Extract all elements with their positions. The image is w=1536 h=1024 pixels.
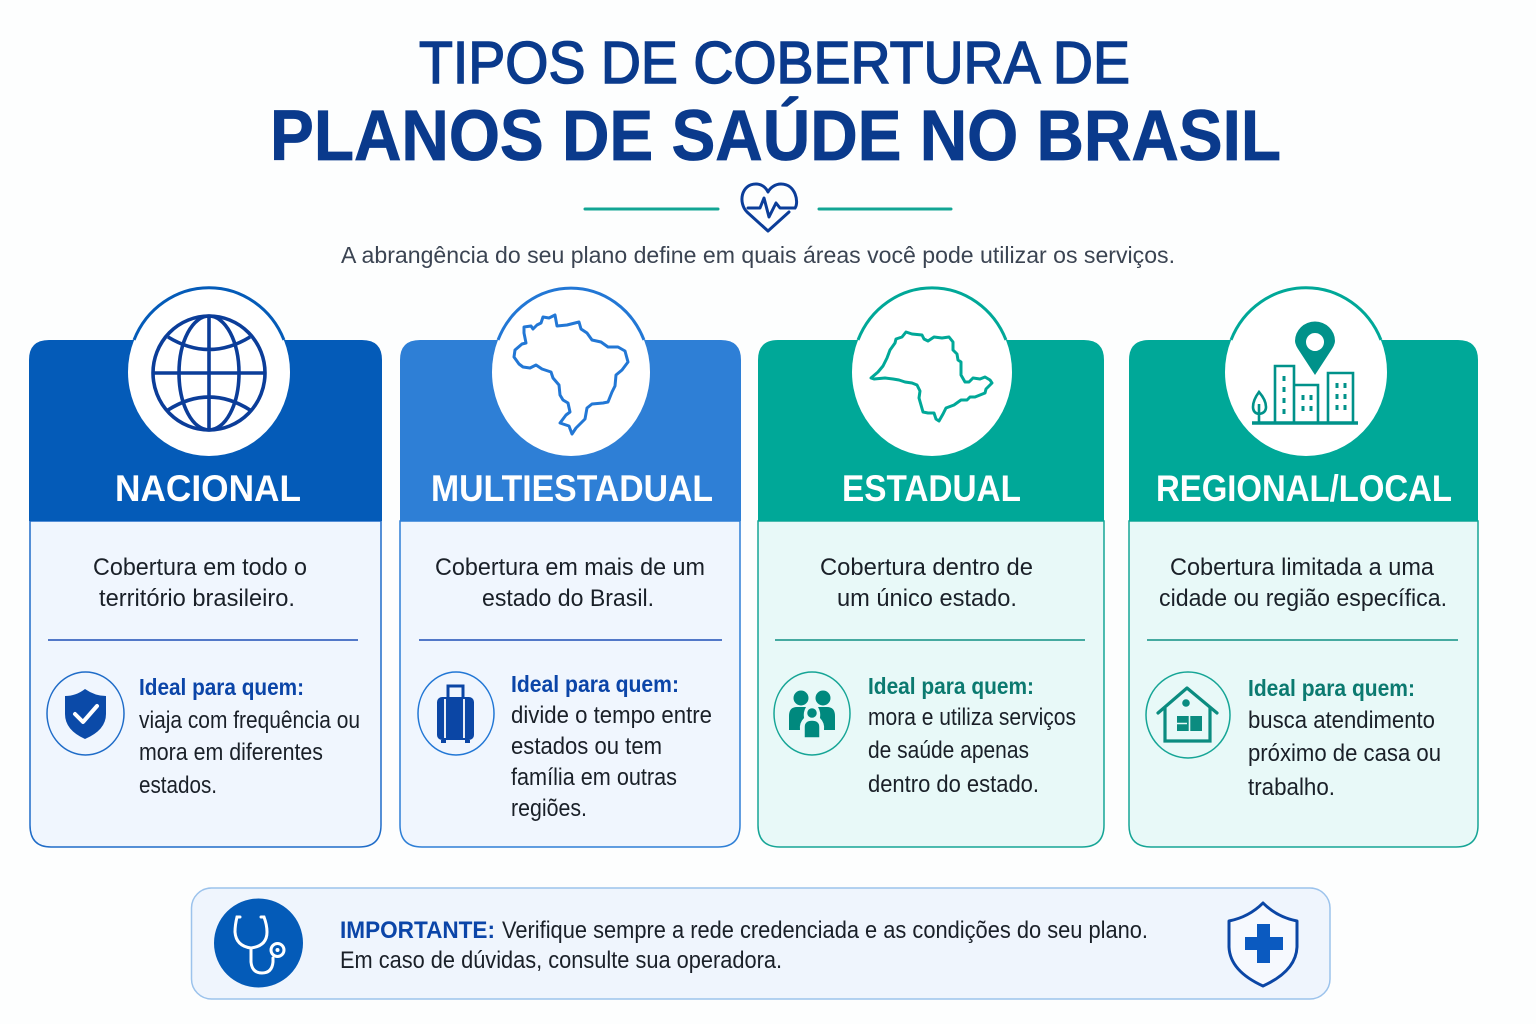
heading: regional/local: REGIONAL/LOCAL: [1156, 468, 1452, 509]
panel: estadual: [758, 288, 1104, 847]
callout text: Verifique sempre a rede credenciada e as condições do seu plano.: [502, 917, 1148, 944]
ideal text: estados ou tem: [511, 733, 662, 760]
ideal text: família em outras: [511, 764, 677, 791]
ideal text: Ideal para quem:: [868, 673, 1034, 699]
heading: multiestadual: MULTIESTADUAL: [431, 468, 713, 509]
description: território brasileiro.: [99, 585, 295, 612]
ideal text: estados.: [139, 772, 217, 799]
icon: shield with check: [47, 672, 124, 755]
card header: [1129, 340, 1478, 521]
title: TIPOS DE COBERTURA DE: [419, 30, 1130, 96]
ideal text: próximo de casa ou: [1248, 740, 1441, 767]
panel: nacional: [29, 288, 382, 847]
card body: [758, 521, 1104, 847]
icon: map of São Paulo: [852, 288, 1012, 456]
icon: stethoscope: [214, 898, 303, 988]
description: [1159, 554, 1447, 612]
ideal text: de saúde apenas: [868, 737, 1029, 764]
description: Cobertura em todo o: [93, 554, 307, 581]
callout box: [192, 888, 1330, 999]
callout text: Em caso de dúvidas, consulte sua operadora.: [340, 947, 782, 974]
ideal text: Ideal para quem:: [511, 671, 679, 697]
icon: map of Brazil: [492, 288, 650, 456]
ideal text: busca atendimento: [1248, 707, 1435, 734]
description: estado do Brasil.: [482, 585, 654, 612]
card body: [400, 521, 740, 847]
icon: shield with cross: [1229, 903, 1297, 986]
ideal text: [139, 674, 360, 799]
description: [435, 554, 705, 612]
card body: [1129, 521, 1478, 847]
description: cidade ou região específica.: [1159, 585, 1447, 612]
heading: nacional: NACIONAL: [115, 468, 301, 509]
panel: regional/local: [1129, 288, 1478, 847]
ideal text: trabalho.: [1248, 774, 1335, 801]
subtitle: A abrangência do seu plano define em quais áreas você pode utilizar os serviços.: [341, 242, 1175, 268]
ideal text: Ideal para quem:: [139, 674, 304, 700]
ideal text: viaja com frequência ou: [139, 707, 360, 734]
callout text: [340, 917, 1148, 974]
description: [820, 554, 1033, 612]
card body: [30, 521, 381, 847]
icon: suitcase: [418, 672, 494, 755]
description: [93, 554, 307, 612]
callout: importante: [192, 888, 1330, 999]
icon: globe: [128, 288, 290, 456]
panel: multiestadual: [400, 288, 741, 847]
ideal text: regiões.: [511, 795, 587, 822]
icon: family: [774, 672, 850, 755]
heading: estadual: ESTADUAL: [842, 468, 1021, 509]
ideal text: divide o tempo entre: [511, 702, 712, 729]
title: PLANOS DE SAÚDE NO BRASIL: [270, 97, 1281, 176]
ideal text: dentro do estado.: [868, 771, 1039, 798]
ideal text: mora e utiliza serviços: [868, 704, 1076, 731]
ideal text: mora em diferentes: [139, 739, 323, 766]
icon: city with location pin: [1225, 288, 1387, 456]
description: Cobertura limitada a uma: [1170, 554, 1435, 581]
ideal text: [1248, 675, 1441, 801]
card header: [758, 340, 1104, 521]
callout text: IMPORTANTE:: [340, 917, 495, 944]
title: [270, 30, 1281, 176]
description: Cobertura dentro de: [820, 554, 1033, 581]
icon: house: [1146, 672, 1230, 758]
card header: [400, 340, 741, 521]
card header: [29, 340, 382, 521]
ideal text: [868, 673, 1076, 798]
description: Cobertura em mais de um: [435, 554, 705, 581]
description: um único estado.: [837, 585, 1017, 612]
ideal text: [511, 671, 712, 822]
ideal text: Ideal para quem:: [1248, 675, 1415, 701]
icon: heart with pulse divider: [585, 184, 951, 231]
